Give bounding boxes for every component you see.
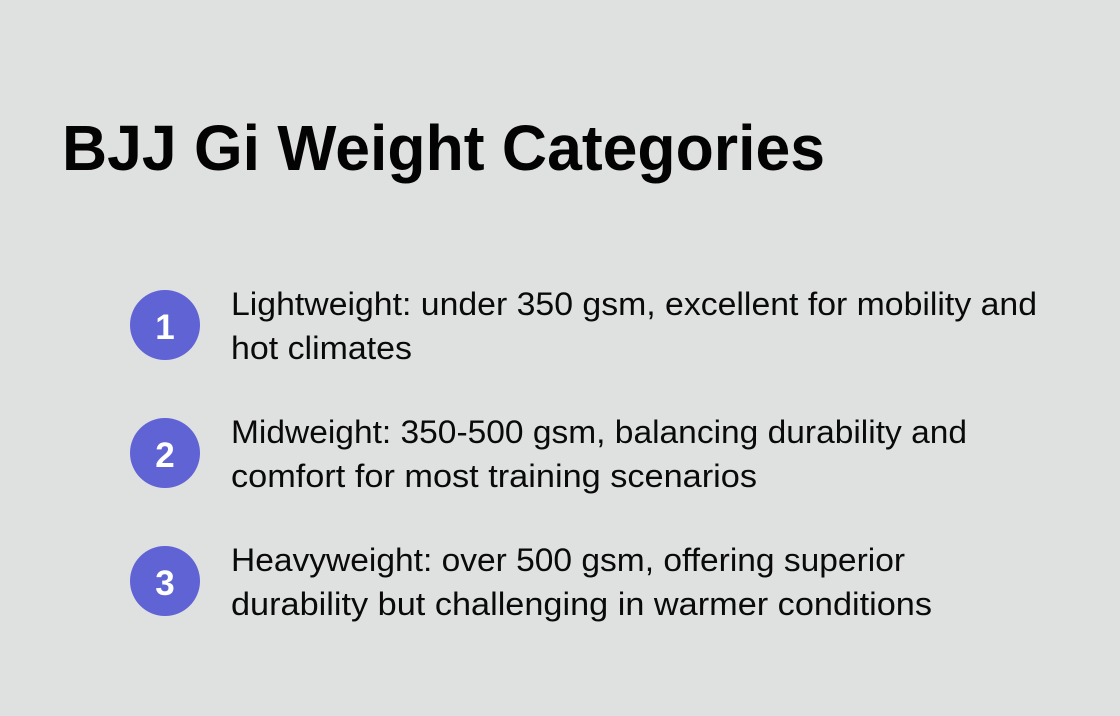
item 3 text: durability but challenging in warmer conditions — [231, 586, 932, 622]
number badge 2: 2 — [155, 436, 175, 475]
list item 1: lightweight — [130, 286, 1037, 366]
list item 2: midweight — [130, 414, 967, 494]
title: BJJ Gi Weight Categories — [62, 112, 825, 184]
number badge 3 — [130, 546, 200, 616]
number badge 3: 3 — [155, 564, 175, 603]
item 1 text: hot climates — [231, 330, 412, 366]
item 3 text — [231, 542, 932, 622]
list item 3: heavyweight — [130, 542, 932, 622]
item 2 text: Midweight: 350-500 gsm, balancing durability and — [231, 414, 967, 450]
item 1 text — [231, 286, 1037, 366]
item 3 text: Heavyweight: over 500 gsm, offering superior — [231, 542, 905, 578]
number badge 2 — [130, 418, 200, 488]
number badge 1 — [130, 290, 200, 360]
item 1 text: Lightweight: under 350 gsm, excellent for mobility and — [231, 286, 1037, 322]
item 2 text — [231, 414, 967, 494]
number badge 1: 1 — [155, 308, 175, 347]
item 2 text: comfort for most training scenarios — [231, 458, 757, 494]
